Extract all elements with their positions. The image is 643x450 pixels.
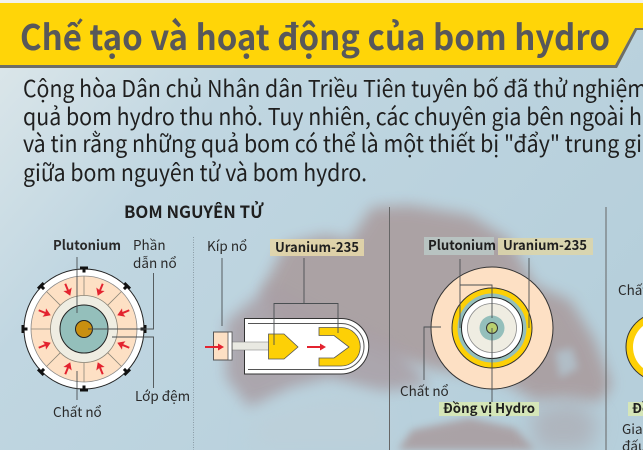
implosion bomb diagram — [22, 234, 190, 421]
uranium layer — [452, 288, 532, 368]
label: kíp nổ: Kíp nổ — [207, 235, 247, 255]
label: chất nổ: Chất nổ — [53, 401, 102, 421]
white gap — [462, 298, 522, 358]
leader lines — [77, 257, 154, 400]
label: phần dẫn nổ: Phần — [133, 234, 166, 254]
explosive sphere — [431, 267, 553, 389]
label: đồng vị hydro: Đồng vị Hydro — [443, 397, 535, 417]
explosive layer — [31, 276, 137, 382]
dotted divider — [192, 237, 194, 450]
outer ring — [626, 313, 643, 381]
leader lines — [424, 258, 529, 402]
uranium target — [319, 328, 360, 366]
label: uranium-235: Uranium-235 — [275, 236, 359, 256]
outer shell — [24, 269, 144, 389]
label: giai đoạn: Gia — [622, 418, 643, 438]
label: plutonium: Plutonium — [53, 234, 121, 254]
red arrows — [205, 344, 326, 350]
mushroom cloud — [262, 205, 612, 402]
heading: bom nguyên tử: BOM NGUYÊN TỬ — [124, 198, 264, 223]
title: Chế tạo và hoạt động của bom hydro — [20, 10, 610, 61]
detonator markers — [22, 266, 146, 392]
inner tamper — [468, 304, 516, 352]
casing — [244, 318, 369, 374]
inward arrows — [37, 282, 131, 376]
detonator — [214, 332, 232, 360]
solid divider — [605, 207, 607, 450]
tamper — [50, 296, 118, 362]
hydrogen isotope core — [486, 322, 498, 334]
uranium bullet — [268, 334, 298, 359]
label: plutonium: Plutonium — [428, 234, 496, 254]
intro paragraph: giữa bom nguyên tử và bom hydro. — [23, 154, 367, 188]
intro paragraph — [23, 70, 643, 188]
plutonium layer — [458, 294, 526, 362]
leader lines — [222, 258, 338, 345]
label: lớp đệm: Lớp đệm — [135, 385, 190, 405]
title banner — [0, 0, 643, 68]
plutonium — [60, 305, 108, 353]
gun-type bomb diagram — [205, 235, 369, 374]
core — [76, 320, 92, 338]
label: uranium-235: Uranium-235 — [503, 234, 587, 254]
label: phần dẫn nổ: dẫn nổ — [133, 252, 177, 272]
hydrogen boosted bomb diagram — [400, 234, 593, 417]
label: chất nổ: Chất nổ — [400, 380, 449, 400]
hydrogen bomb diagram (cropped) — [618, 279, 643, 450]
solid divider — [388, 207, 390, 450]
teal core — [480, 316, 504, 340]
rod — [232, 342, 269, 350]
